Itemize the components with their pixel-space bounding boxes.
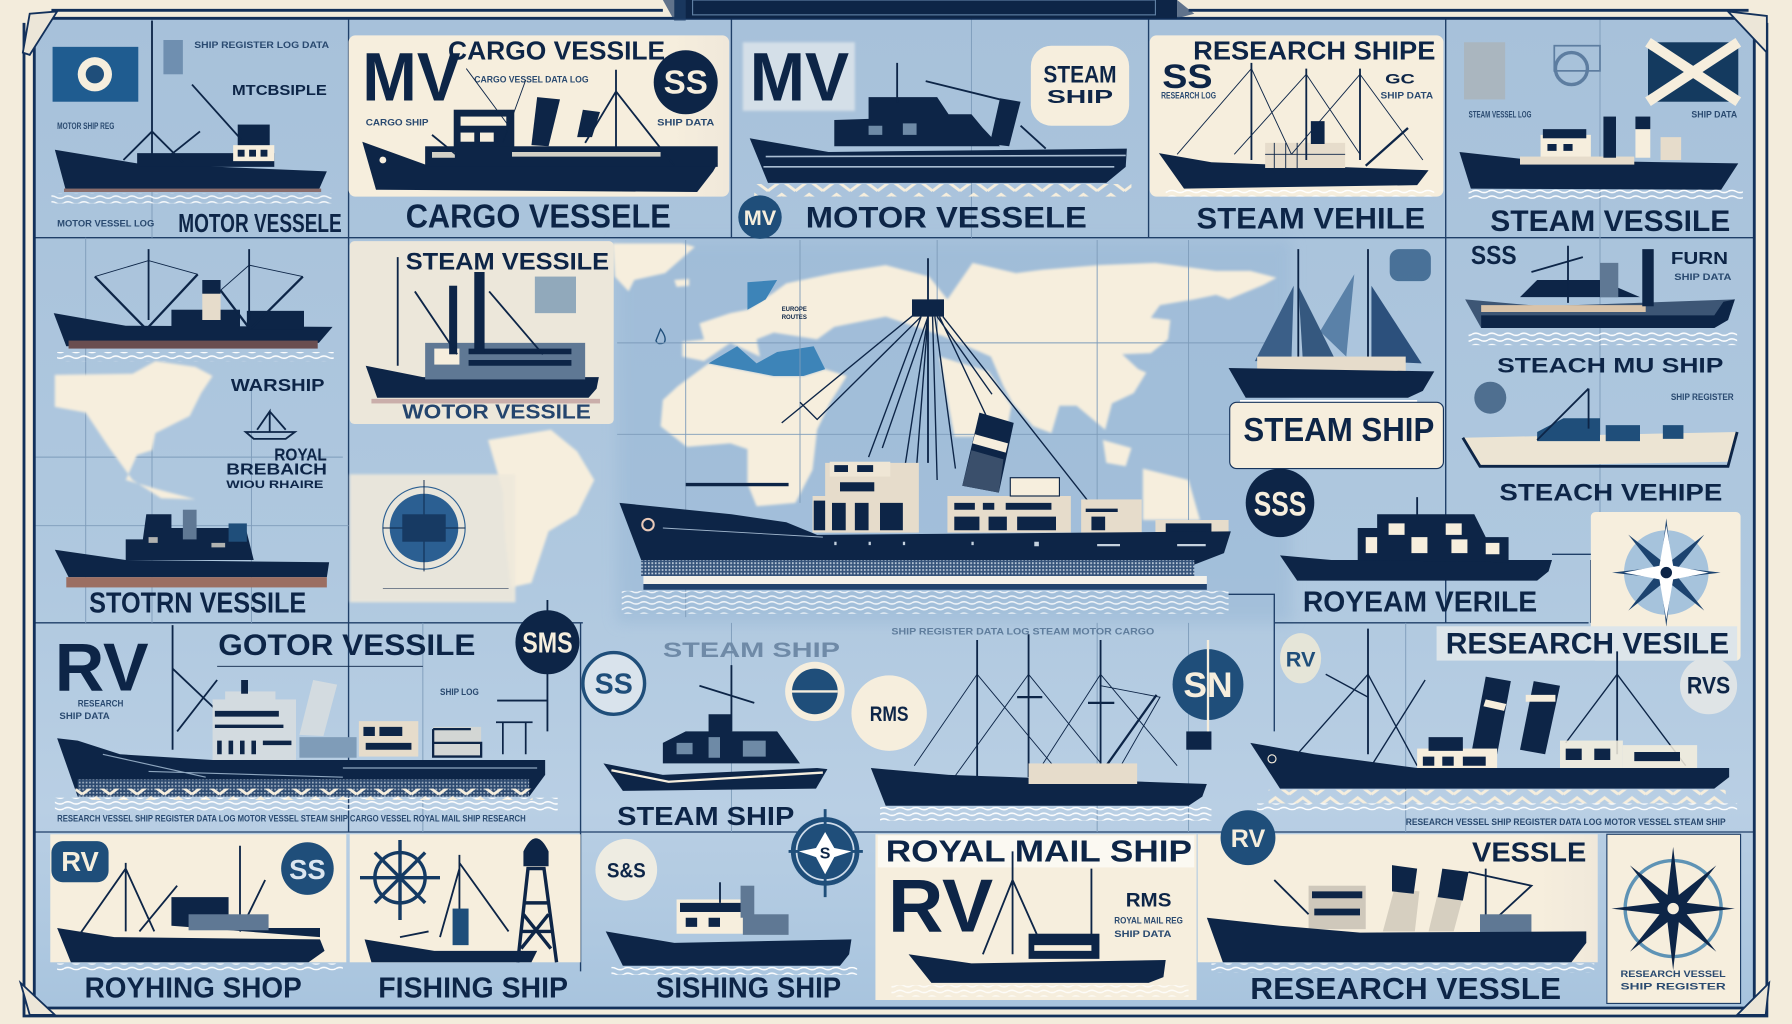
caption RMS: ROYAL MAIL REG <box>1114 915 1183 925</box>
panel: gotor vessile <box>55 600 579 824</box>
icon tag <box>1390 249 1431 281</box>
caption: SHIP REGISTER <box>1671 392 1734 402</box>
prefix SS: SS <box>1162 58 1213 96</box>
captions: SHIP DATA <box>657 118 715 128</box>
badge MV: MV <box>744 205 777 230</box>
icon: ship wheel <box>360 840 440 920</box>
label: MOTOR VESSELE <box>806 201 1087 234</box>
prefix RV: RV <box>55 630 149 705</box>
ship <box>366 257 600 403</box>
panel: steam vessile <box>350 241 614 424</box>
captions: CARGO SHIP <box>366 118 429 128</box>
notes: WIOU RHAIRE <box>226 479 324 491</box>
captions: SHIP DATA <box>1381 90 1434 100</box>
ship <box>51 21 331 203</box>
label: SISHING SHIP <box>656 973 841 1005</box>
captions: SHIP DATA <box>59 711 110 721</box>
panel: right column <box>1463 240 1741 661</box>
caption RMS: RMS <box>1126 889 1171 911</box>
panel: steam vessile top right <box>1459 42 1743 238</box>
label: WOTOR VESSILE <box>402 400 591 423</box>
ship <box>1280 497 1552 581</box>
panel: compass bottom right <box>1607 834 1741 1003</box>
heading: STEAM SHIP <box>663 637 840 662</box>
small caption: STEAM VESSEL LOG <box>1469 110 1531 120</box>
fine grid <box>34 18 1600 832</box>
label: STEAM VEHILE <box>1197 203 1425 236</box>
badge SS: SS <box>289 854 326 885</box>
connector <box>1229 554 1591 731</box>
badge SN: SN <box>1183 665 1233 705</box>
map caption: ROUTES <box>782 314 807 321</box>
masts <box>914 634 1177 777</box>
ship <box>1229 249 1434 402</box>
panel: storm vessile <box>55 510 329 620</box>
map caption: EUROPE <box>782 306 807 313</box>
badge RV: RV <box>61 846 100 877</box>
captions: RESEARCH LOG <box>1161 90 1216 100</box>
label: FISHING SHIP <box>378 973 568 1005</box>
ship <box>871 768 1207 806</box>
icon: small ship <box>246 411 295 439</box>
heading <box>878 835 1194 867</box>
heading: RESEARCH SHIPE <box>1193 35 1435 65</box>
badge SSS <box>1246 469 1314 537</box>
heading: STEAM SHIP <box>1243 412 1434 449</box>
panel: fishing ship <box>350 834 581 1005</box>
heading <box>1437 626 1737 661</box>
small captions: MTCBSIPLE <box>232 83 327 99</box>
badge RV: RV <box>1231 825 1265 853</box>
notes: ROYAL <box>274 445 327 465</box>
panel: research vesile <box>1250 626 1737 827</box>
heading: GOTOR VESSILE <box>218 629 475 662</box>
badge SSS: S&S <box>607 858 646 883</box>
ship <box>1459 117 1743 199</box>
badge RVS <box>1680 657 1737 714</box>
steam ship bubble: SHIP <box>1047 86 1113 107</box>
badge SS: SS <box>595 669 633 701</box>
badge SS <box>654 50 718 114</box>
ship <box>55 510 329 587</box>
caption RMS: SHIP DATA <box>1114 929 1172 939</box>
panel: left ship row 2 <box>54 249 334 361</box>
panel: royeam vehile <box>1229 497 1591 731</box>
captions: SHIP LOG <box>440 687 479 697</box>
MV tile <box>743 42 855 111</box>
label: ROYEAM VERILE <box>1303 586 1537 618</box>
tiny caption: SHIP REGISTER DATA LOG STEAM MOTOR CARGO <box>891 626 1154 636</box>
compass <box>1611 847 1735 970</box>
ship <box>1463 389 1737 466</box>
label <box>1230 402 1443 469</box>
map caption <box>782 306 807 321</box>
emblem <box>785 662 845 721</box>
badge SMS: SMS <box>522 628 573 660</box>
panel: research vessel <box>1198 810 1598 1006</box>
badge SS <box>583 653 645 714</box>
caption: RESEARCH VESSEL <box>1621 969 1726 979</box>
small caption: SHIP DATA <box>1691 110 1738 120</box>
small captions: SHIP REGISTER LOG DATA <box>194 40 330 50</box>
map: north america <box>55 361 213 499</box>
caption <box>1621 969 1726 992</box>
ship <box>55 625 558 811</box>
prefix SSS: SSS <box>1471 240 1517 270</box>
badge SSS: SSS <box>1254 485 1306 523</box>
prefix MV: MV <box>362 39 461 116</box>
ship <box>606 882 857 975</box>
warship label: WARSHIP <box>231 375 325 395</box>
flag tile <box>535 277 576 313</box>
panel: cargo vessile <box>349 35 729 235</box>
badge SSS <box>595 839 657 901</box>
heading: CARGO VESSILE <box>448 35 665 65</box>
small captions <box>57 40 330 131</box>
label: CARGO VESSELE <box>406 198 671 235</box>
panel: royal mail ship: ROYAL MAIL SHIP <box>886 834 1192 869</box>
label: ROYHING SHOP <box>85 973 302 1005</box>
badge RV <box>1280 633 1321 683</box>
badge RMS <box>851 675 927 751</box>
label: STEACH VEHIPE <box>1499 480 1722 507</box>
panel: sishing ship <box>595 809 863 1005</box>
panel: motor vessel centre <box>738 39 1131 239</box>
title banner <box>663 0 1194 21</box>
world map <box>488 240 1291 623</box>
steam ship bubble <box>1031 46 1129 126</box>
captions: GC <box>1385 71 1415 86</box>
ship <box>1465 246 1737 345</box>
flag <box>53 47 138 102</box>
badge MV <box>738 195 782 239</box>
badge RV: RV <box>1286 646 1316 671</box>
captions <box>366 74 715 128</box>
vignette images <box>1464 42 1600 99</box>
panel: motor vessele <box>51 21 342 238</box>
ship <box>365 855 537 962</box>
badge SMS <box>497 600 579 731</box>
icon: compass S <box>789 809 863 897</box>
ship <box>891 851 1189 997</box>
prefix MV: MV <box>750 39 849 116</box>
tiny caption: RESEARCH VESSEL SHIP REGISTER DATA LOG MOTOR VESSEL STEAM SHIP <box>1406 817 1726 827</box>
label: STOTRN VESSILE <box>89 588 306 620</box>
emblem <box>1474 382 1506 414</box>
ship <box>1250 629 1737 810</box>
badge SS <box>281 842 334 895</box>
badge RVS: RVS <box>1687 673 1730 700</box>
prefix RV: RV <box>888 863 993 947</box>
ship <box>750 63 1131 197</box>
flag <box>1648 42 1738 102</box>
panel: research vesile: RESEARCH VESILE <box>1446 628 1729 661</box>
label: STEAM VESSILE <box>1490 205 1730 238</box>
captions: CARGO VESSEL DATA LOG <box>474 74 589 84</box>
tiny caption: MOTOR VESSEL LOG <box>57 218 154 228</box>
heading: STEAM VESSILE <box>406 249 609 276</box>
captions <box>59 687 479 721</box>
panel: sailing ship and steam ship <box>1229 249 1443 537</box>
compass card <box>1591 512 1741 661</box>
icon: compass S: S <box>820 845 831 862</box>
steam ship bubble: STEAM <box>1043 61 1117 88</box>
ship <box>362 69 718 192</box>
ship <box>1207 865 1594 973</box>
caption: FURN <box>1671 248 1728 268</box>
hero ship <box>619 258 1231 614</box>
panel: rv roying ship <box>50 834 346 1005</box>
notes: BREBAICH <box>226 461 327 478</box>
badge RV <box>1221 810 1275 865</box>
badge RMS: RMS <box>870 701 909 726</box>
panel: research ship <box>1150 35 1443 236</box>
caption: SHIP DATA <box>1674 272 1732 282</box>
caption <box>1671 248 1732 282</box>
caption RMS <box>1114 889 1183 939</box>
panel: three mast ship <box>871 626 1243 821</box>
south america <box>488 430 594 587</box>
small captions: MOTOR SHIP REG <box>57 121 114 131</box>
ship <box>1159 63 1434 197</box>
panel: steam ship centre <box>583 637 927 831</box>
label: RESEARCH VESSLE <box>1250 971 1561 1006</box>
badge SN <box>1173 640 1243 731</box>
badge SS: SS <box>664 65 708 102</box>
small caption <box>1469 110 1738 120</box>
captions: RESEARCH <box>78 698 123 708</box>
panel: compass small <box>350 474 515 602</box>
ship <box>603 665 827 791</box>
ship <box>57 846 343 970</box>
caption: SHIP REGISTER <box>1621 982 1726 992</box>
icon: lighthouse <box>518 838 557 962</box>
flag <box>1186 731 1211 750</box>
heading: VESSLE <box>1472 837 1586 868</box>
label: STEAM SHIP <box>617 801 794 831</box>
panel: royal mail ship <box>875 834 1197 1000</box>
heading: STEACH MU SHIP <box>1497 353 1723 378</box>
badge RV <box>51 841 109 882</box>
label: MOTOR VESSELE <box>178 208 342 238</box>
notes <box>226 445 327 491</box>
tiny caption: RESEARCH VESSEL SHIP REGISTER DATA LOG MOTOR VESSEL STEAM SHIP CARGO VESSEL ROYAL MAIL SHIP RESEARCH <box>57 814 526 824</box>
captions <box>1161 71 1434 100</box>
panel: warship notes and north america <box>55 361 327 499</box>
